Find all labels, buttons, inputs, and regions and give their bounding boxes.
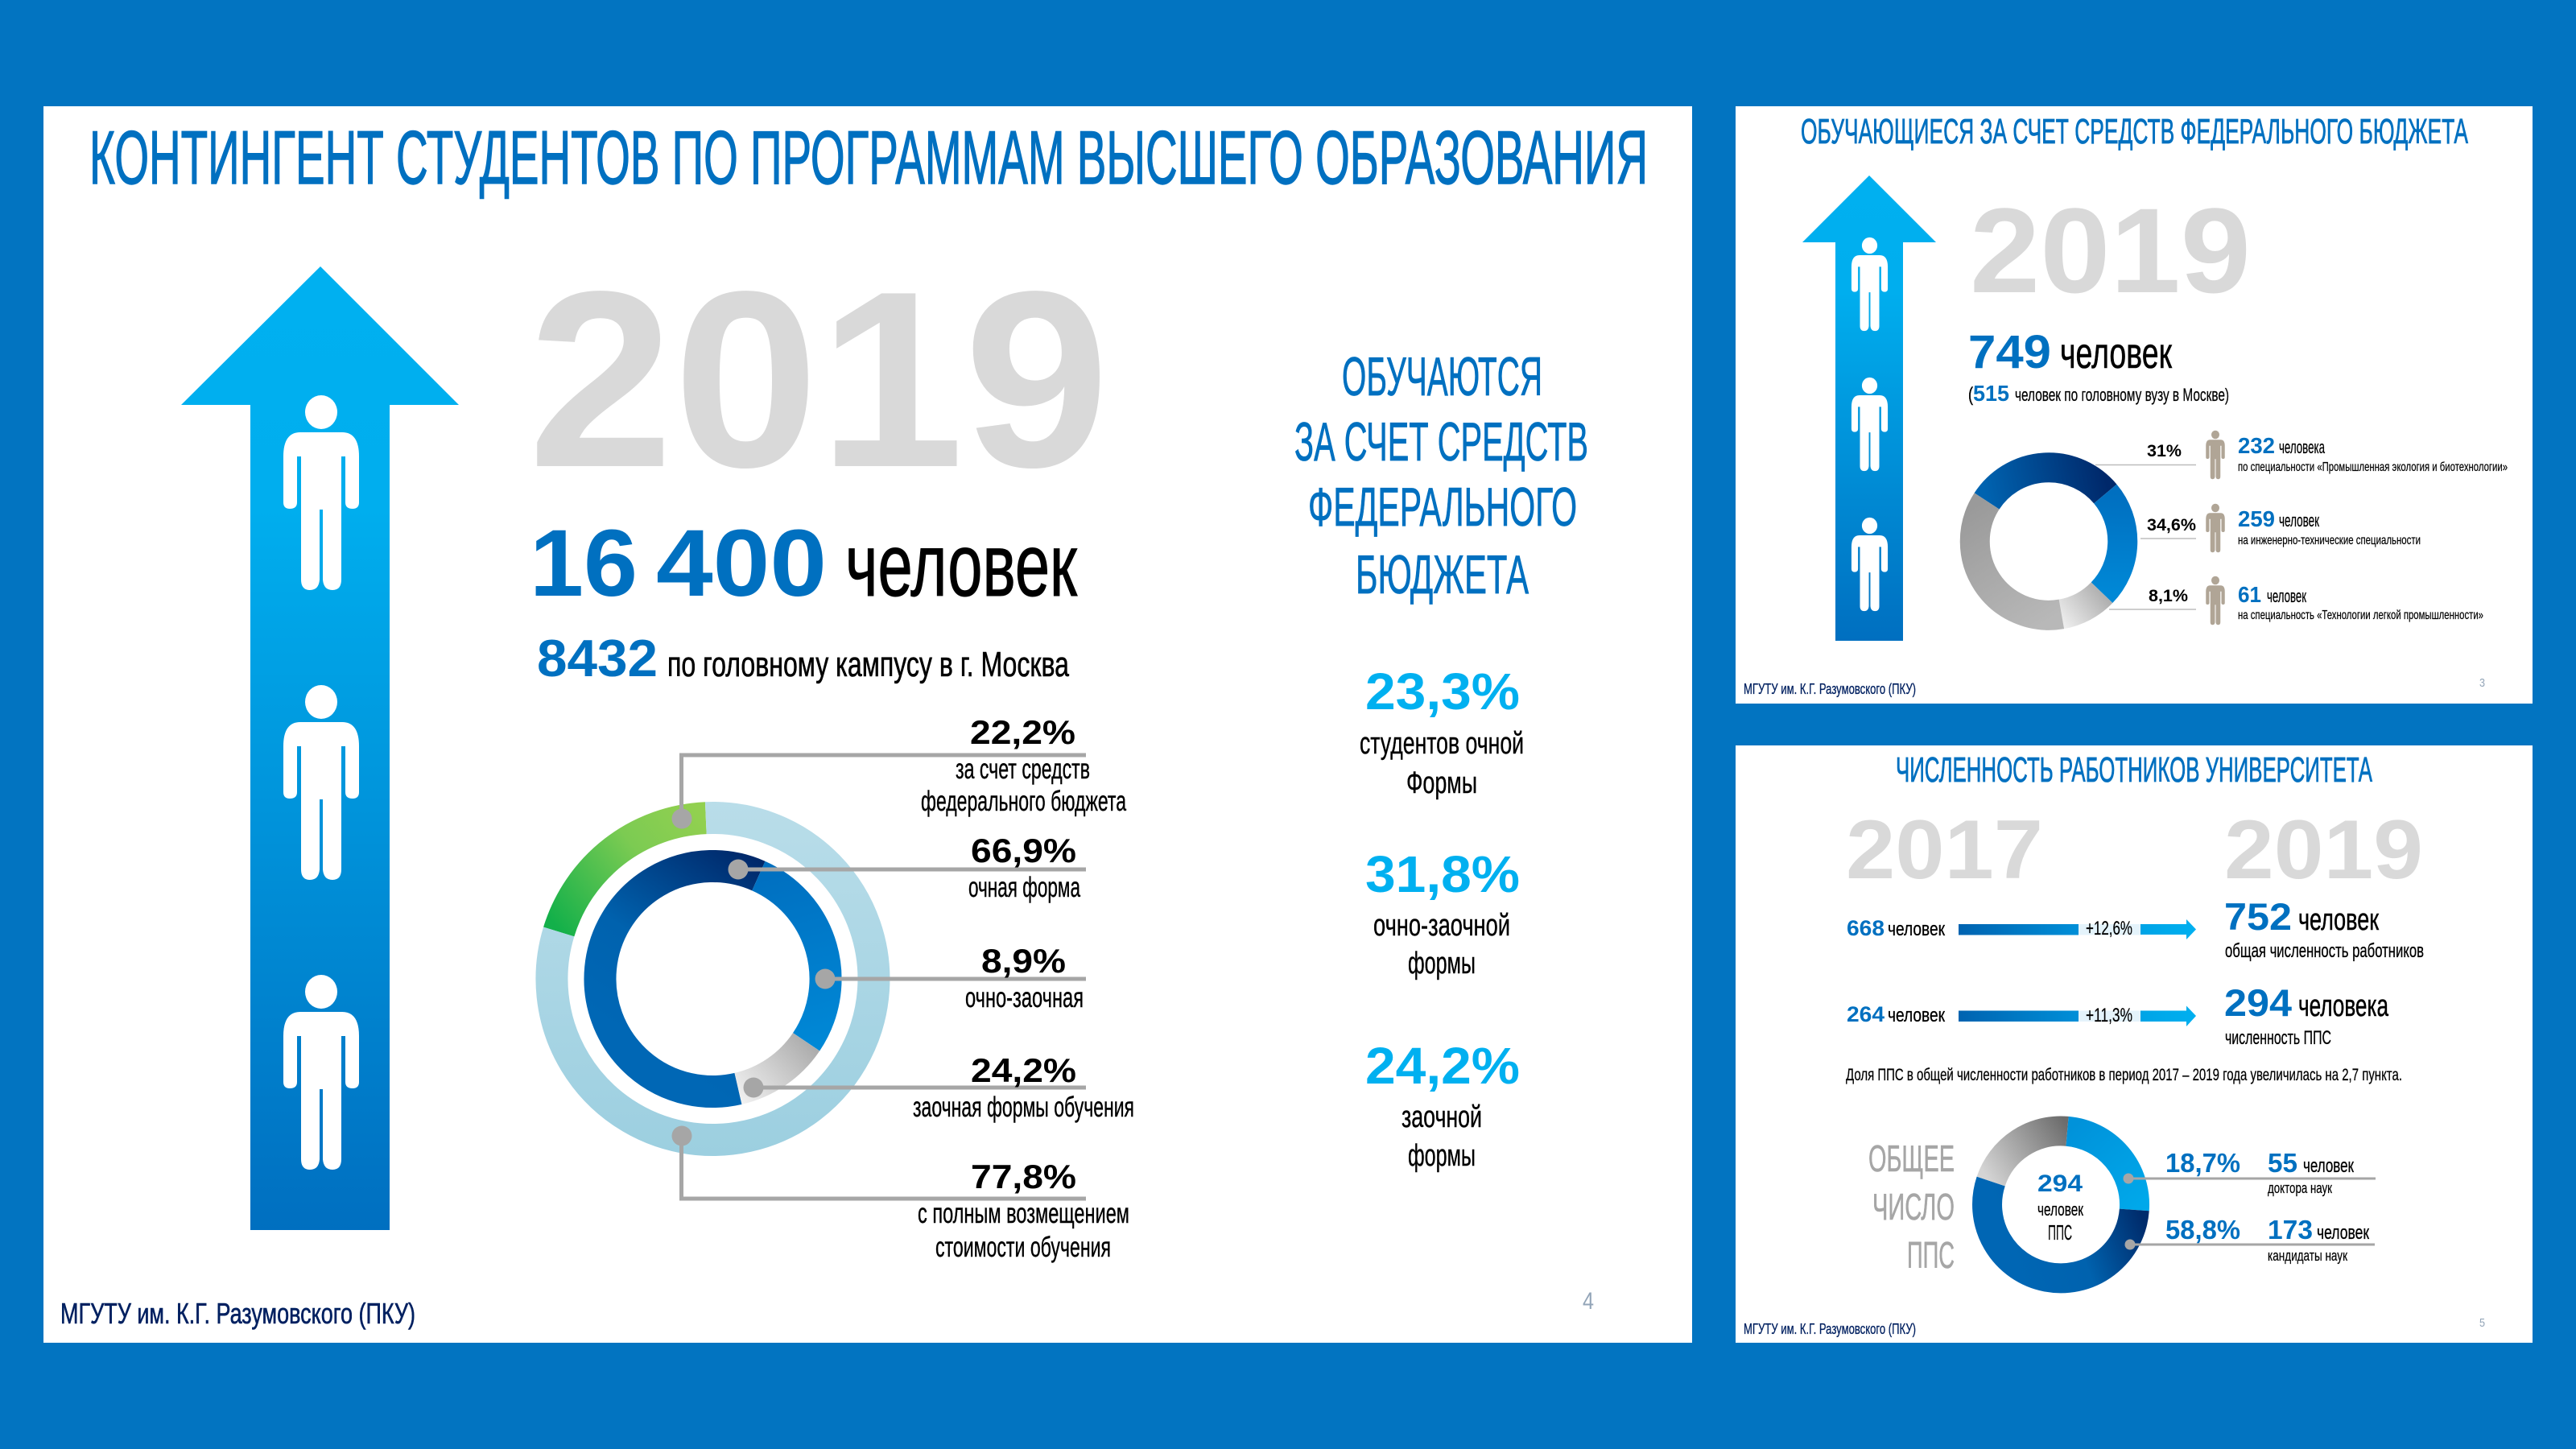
row: teaching staff: человек	[1888, 1005, 1945, 1026]
callout: candidates: кандидаты наук	[2268, 1248, 2347, 1264]
row: 31%	[2147, 431, 2508, 479]
callout: 8,9%	[965, 942, 1084, 1013]
row: 34,6%: на инженерно-технические специальности	[2238, 534, 2421, 547]
stat: 31,8%: 31,8%	[1365, 845, 1520, 903]
callout: 24,2%: 24,2%	[971, 1051, 1076, 1089]
footer: МГУТУ им. К.Г. Разумовского (ПКУ)	[1744, 681, 1916, 697]
donut center label: ППС	[2048, 1220, 2072, 1245]
arrow with people icons	[1802, 175, 1936, 641]
arrow	[2140, 919, 2196, 939]
year 2019: 2019	[1970, 183, 2251, 318]
callout lines and dots	[671, 755, 1086, 1199]
side heading: ФЕДЕРАЛЬНОГО	[1308, 477, 1577, 538]
side label	[1868, 1137, 1955, 1276]
total count	[1968, 326, 2172, 378]
callout: 22,2%: за счет средств	[956, 753, 1090, 785]
row: teaching staff	[1847, 981, 2389, 1049]
row: 34,6%: 34,6%	[2147, 516, 2196, 535]
side label: ЧИСЛО	[1872, 1186, 1955, 1228]
callout: candidates	[2125, 1215, 2375, 1264]
stat: 24,2%: формы	[1408, 1139, 1476, 1173]
side heading: ЗА СЧЕТ СРЕДСТВ	[1294, 411, 1588, 473]
panel: student contingent	[43, 106, 1692, 1343]
total count: 749	[1968, 326, 2051, 378]
icon: person 1	[1852, 237, 1888, 331]
callout: doctors	[2124, 1148, 2376, 1196]
page number: 4	[1583, 1288, 1594, 1315]
callout: candidates: 173	[2268, 1215, 2313, 1245]
row: 8,1%: 8,1%	[2149, 587, 2188, 605]
row: 8,1%: 61	[2238, 582, 2261, 607]
row: 8,1%: на специальность «Технологии легкой промышленности»	[2238, 609, 2483, 622]
head university count: 515	[1973, 381, 2009, 406]
callout: 77,8%: с полным возмещением	[918, 1198, 1129, 1229]
stat: 23,3%: студентов очной	[1360, 727, 1524, 761]
row: 8,1%	[2149, 576, 2483, 625]
head university count: (	[1968, 384, 1973, 406]
side heading	[1294, 346, 1588, 605]
icon: person	[2206, 431, 2225, 479]
row: teaching staff: человека	[2298, 989, 2389, 1023]
callout: 77,8%: стоимости обучения	[935, 1232, 1111, 1263]
side heading: ОБУЧАЮТСЯ	[1342, 346, 1542, 407]
side label: ОБЩЕЕ	[1868, 1137, 1955, 1179]
callout: 66,9%	[968, 832, 1080, 903]
callout: 8,9%: очно-заочная	[965, 982, 1084, 1013]
year 2017: 2017	[1846, 803, 2043, 897]
callout: 22,2%: 22,2%	[970, 713, 1075, 751]
stat: 23,3%: 23,3%	[1365, 663, 1520, 720]
leader lines	[2095, 465, 2196, 609]
stat: 31,8%	[1365, 845, 1520, 980]
callout: 66,9%: 66,9%	[971, 832, 1076, 869]
row: total staff: общая численность работников	[2225, 940, 2424, 962]
Moscow campus count	[537, 629, 1069, 687]
row: total staff: человек	[2298, 903, 2379, 937]
row: 34,6%: человек	[2279, 510, 2319, 530]
total students: 400	[656, 510, 827, 617]
page number: 5	[2479, 1316, 2485, 1330]
side heading: БЮДЖЕТА	[1356, 544, 1529, 605]
row: total staff: человек	[1888, 919, 1945, 940]
row: teaching staff: 264	[1847, 1002, 1885, 1026]
head university count	[1968, 381, 2229, 406]
row: total staff	[1847, 895, 2424, 962]
callout: 22,2%: федерального бюджета	[921, 786, 1126, 817]
stat: 24,2%: заочной	[1402, 1100, 1482, 1134]
row: 8,1%: человек	[2267, 586, 2306, 606]
head university count: человек по головному вузу в Москве)	[2015, 385, 2229, 405]
donut chart	[1988, 1131, 2135, 1278]
icon: person	[2206, 576, 2225, 625]
stat: 24,2%: 24,2%	[1365, 1037, 1520, 1095]
row: teaching staff: 294	[2224, 981, 2292, 1024]
callout: doctors: человек	[2303, 1155, 2354, 1177]
stat: 31,8%: очно-заочной	[1373, 909, 1510, 943]
row: 34,6%: 259	[2238, 506, 2275, 531]
Moscow campus count: 8432	[537, 629, 658, 687]
stat: 23,3%	[1360, 663, 1524, 800]
callout: 66,9%: очная форма	[968, 872, 1080, 903]
Moscow campus count: по головному кампусу в г. Москва	[667, 645, 1069, 684]
panel: university staff	[1736, 745, 2533, 1343]
callout: 24,2%	[913, 1051, 1134, 1123]
icon: person 2	[1852, 378, 1888, 471]
row: teaching staff: численность ППС	[2225, 1027, 2331, 1049]
stat: 31,8%: формы	[1408, 947, 1476, 980]
icon: person	[2206, 504, 2225, 552]
total students	[530, 510, 1078, 617]
callout: 22,2%	[921, 713, 1126, 817]
row: 34,6%	[2147, 504, 2421, 552]
year 2019: 2019	[2224, 803, 2423, 897]
callout: candidates: человек	[2317, 1222, 2369, 1244]
stat: 23,3%: Формы	[1406, 766, 1477, 800]
icon: person 1	[283, 395, 359, 590]
callout: 8,9%: 8,9%	[981, 942, 1066, 980]
arrow with people icons	[181, 266, 459, 1230]
icon: person 3	[1852, 518, 1888, 611]
callout: candidates: 58,8%	[2165, 1215, 2240, 1245]
double donut chart	[551, 818, 873, 1140]
arrow	[2140, 1006, 2196, 1026]
callout: 24,2%: заочная формы обучения	[913, 1092, 1134, 1123]
donut center label: 294	[2037, 1170, 2083, 1197]
icon: person 2	[283, 685, 359, 880]
footer: МГУТУ им. К.Г. Разумовского (ПКУ)	[60, 1297, 415, 1330]
footer: МГУТУ им. К.Г. Разумовского (ПКУ)	[1744, 1321, 1916, 1337]
row: total staff: +12,6%	[2086, 918, 2132, 939]
donut center label	[2037, 1170, 2083, 1245]
year 2019: 2019	[528, 240, 1109, 520]
callout: doctors: 18,7%	[2165, 1148, 2240, 1178]
total students: человек	[845, 516, 1078, 615]
row: 31%: 232	[2238, 433, 2275, 458]
row: teaching staff: +11,3%	[2086, 1005, 2132, 1026]
row: total staff: 668	[1847, 916, 1885, 940]
page number: 3	[2479, 676, 2485, 690]
donut center label: человек	[2037, 1199, 2083, 1220]
total students: 16	[530, 510, 638, 617]
panel: federal budget students	[1736, 106, 2533, 704]
stat: 24,2%	[1365, 1037, 1520, 1173]
row: 31%: 31%	[2147, 442, 2182, 460]
donut chart	[1975, 468, 2123, 615]
total count: человек	[2060, 329, 2172, 378]
side label: ППС	[1907, 1234, 1955, 1276]
callout: doctors: 55	[2268, 1148, 2297, 1178]
icon: person 3	[283, 975, 359, 1170]
row: total staff: 752	[2224, 895, 2292, 938]
callout: doctors: доктора наук	[2268, 1180, 2332, 1196]
row: 31%: человека	[2279, 437, 2325, 457]
callout: 77,8%	[918, 1158, 1129, 1263]
callout: 77,8%: 77,8%	[971, 1158, 1076, 1195]
